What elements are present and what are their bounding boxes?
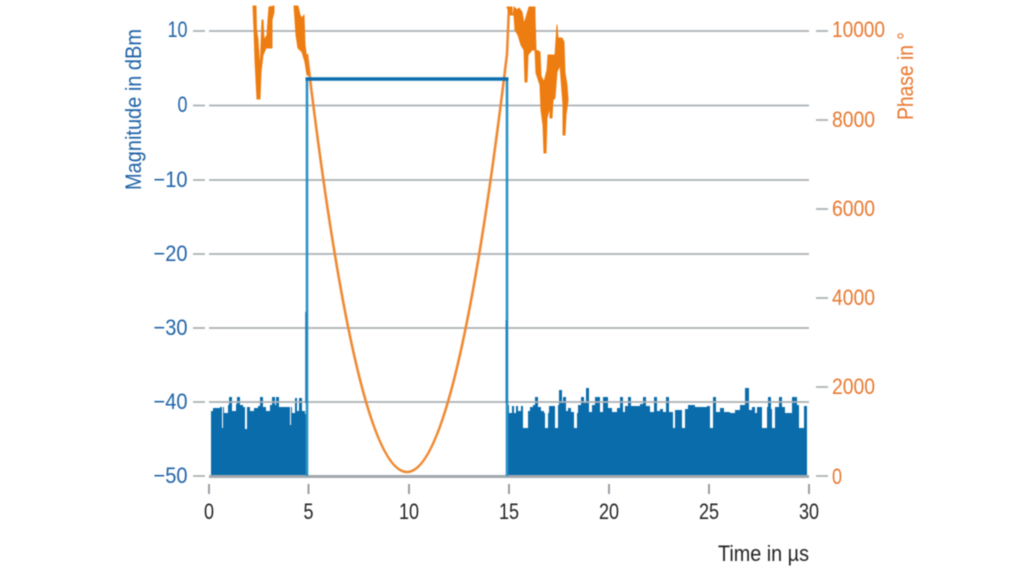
right axis tick labels: 8000 xyxy=(832,107,875,132)
right axis tick labels xyxy=(832,17,885,489)
right axis tick labels: 6000 xyxy=(832,196,875,221)
left axis tick labels xyxy=(154,17,188,488)
x axis tick labels: 30 xyxy=(799,499,819,524)
noise floor: after pulse xyxy=(506,388,807,476)
right axis tick labels: 4000 xyxy=(832,285,875,310)
grid lines xyxy=(193,31,828,476)
orange phase noise: right trace xyxy=(507,7,568,153)
orange phase noise: left traces xyxy=(253,6,309,99)
x axis tick labels: 5 xyxy=(304,499,314,524)
x axis tick labels: 0 xyxy=(204,499,214,524)
x axis tick labels: 15 xyxy=(499,499,519,524)
left axis tick labels: −50 xyxy=(154,463,188,488)
left axis title: Magnitude in dBm xyxy=(121,29,146,190)
left axis tick labels: −30 xyxy=(154,315,188,340)
x axis title: Time in µs xyxy=(718,541,809,566)
noise floor: before pulse xyxy=(211,397,307,476)
x axis tick labels: 10 xyxy=(399,499,419,524)
pulse outline xyxy=(306,79,508,476)
orange phase parabola xyxy=(307,7,509,472)
left axis tick labels: 10 xyxy=(168,17,188,42)
right axis tick labels: 10000 xyxy=(832,17,885,42)
left axis tick labels: −10 xyxy=(154,167,188,192)
right axis tick labels: 0 xyxy=(832,464,842,489)
x axis tick labels: 20 xyxy=(599,499,619,524)
left axis tick labels: 0 xyxy=(178,92,188,117)
x axis tick labels: 25 xyxy=(699,499,719,524)
right axis title: Phase in ° xyxy=(893,32,918,120)
x axis ticks xyxy=(209,484,809,494)
left axis tick labels: −20 xyxy=(154,241,188,266)
left axis tick labels: −40 xyxy=(154,389,188,414)
baseline axis xyxy=(209,475,809,478)
right axis tick labels: 2000 xyxy=(832,374,875,399)
x axis tick labels xyxy=(204,499,819,524)
